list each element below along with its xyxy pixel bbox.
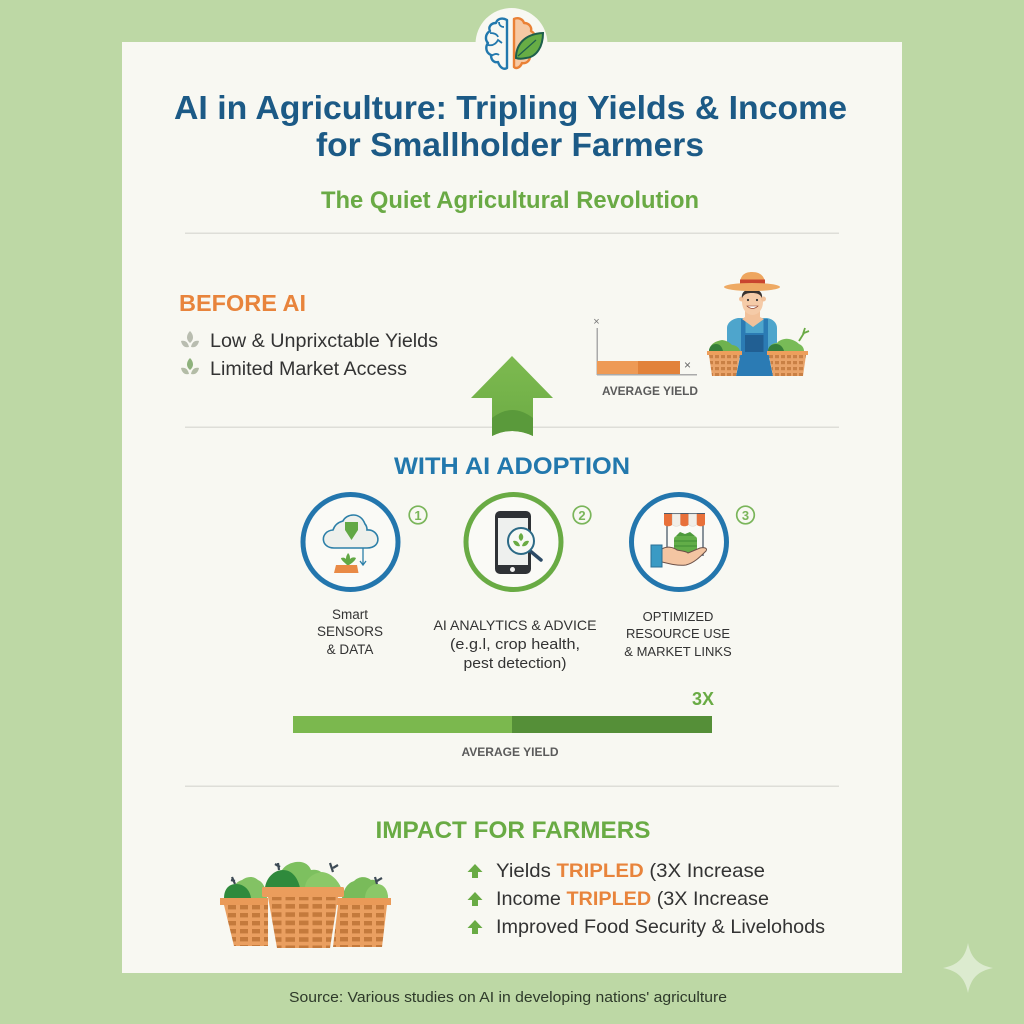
list: farmer impact — [468, 860, 825, 938]
icon: up arrow — [468, 920, 482, 934]
chart: average yield before AI — [593, 316, 698, 398]
badge: 2: 2 — [578, 508, 586, 523]
subtitle: The Quiet Agricultural Revolution — [321, 187, 699, 214]
chart: average yield before AI: AVERAGE YIELD — [602, 384, 698, 398]
label: AI analytics and advice: AI ANALYTICS & ADVICE — [434, 617, 596, 633]
panel: main card — [122, 42, 902, 973]
source note: Source: Various studies on AI in developing nations' agriculture — [289, 990, 727, 1006]
label: AI analytics and advice — [434, 617, 596, 672]
step 2: AI analytics and advice — [434, 494, 596, 672]
icon: grey leaf bullet — [181, 331, 199, 347]
label: optimized resource use and market links: RESOURCE USE — [626, 626, 730, 641]
heading: impact for farmers: IMPACT FOR FARMERS — [376, 817, 650, 844]
chart: average yield with AI: AVERAGE YIELD — [462, 745, 559, 759]
list: before AI problems: Limited Market Access — [210, 359, 407, 380]
badge: 1: 1 — [414, 508, 422, 523]
icon: green leaf bullet — [181, 358, 199, 374]
icon: farmer with baskets — [707, 272, 809, 376]
chart: average yield with AI: 3X — [692, 689, 714, 709]
label: AI analytics and advice: (e.g.l, crop health, — [450, 637, 580, 653]
badge: 3 — [737, 506, 754, 524]
icon: phone with magnifier — [466, 494, 561, 590]
list: farmer impact: Yields TRIPLED (3X Increase — [496, 860, 765, 882]
icon: up arrow — [468, 892, 482, 906]
chart: average yield before AI: × — [684, 358, 691, 372]
label: smart sensors and data: Smart — [332, 607, 368, 622]
heading: before AI: BEFORE AI — [179, 290, 306, 316]
list: farmer impact: Improved Food Security & Livelohods — [496, 916, 825, 938]
label: smart sensors and data: SENSORS — [317, 624, 383, 639]
list: before AI problems — [181, 331, 438, 380]
label: smart sensors and data: & DATA — [327, 642, 373, 657]
label: optimized resource use and market links: & MARKET LINKS — [624, 644, 732, 659]
list: farmer impact: Income TRIPLED (3X Increase — [496, 888, 769, 910]
label: optimized resource use and market links — [624, 609, 732, 659]
badge: 1 — [409, 506, 427, 524]
title — [174, 89, 847, 163]
title: AI in Agriculture: Tripling Yields & Income — [174, 89, 847, 126]
title: for Smallholder Farmers — [316, 126, 704, 163]
label: AI analytics and advice: pest detection) — [464, 656, 566, 672]
heading: with AI adoption: WITH AI ADOPTION — [394, 453, 630, 480]
chart: average yield before AI: × — [593, 316, 600, 328]
icon: up arrow — [468, 864, 482, 878]
icon: brain and leaf logo — [476, 8, 548, 80]
badge: 3: 3 — [742, 508, 749, 523]
icon: cloud and seedling — [303, 494, 398, 590]
icon: vegetable baskets — [220, 862, 391, 948]
label: smart sensors and data — [317, 607, 383, 657]
chart: average yield with AI — [293, 689, 714, 759]
icon: sparkle — [943, 943, 993, 993]
badge: 2 — [573, 506, 591, 524]
step 3: optimized resource use and market links — [624, 494, 754, 659]
icon: market stall and hand — [632, 494, 726, 590]
step 1: smart sensors and data — [303, 494, 427, 657]
label: optimized resource use and market links: OPTIMIZED — [643, 609, 713, 624]
arrow: up — [471, 356, 553, 436]
list: before AI problems: Low & Unprixctable Yields — [210, 331, 438, 352]
